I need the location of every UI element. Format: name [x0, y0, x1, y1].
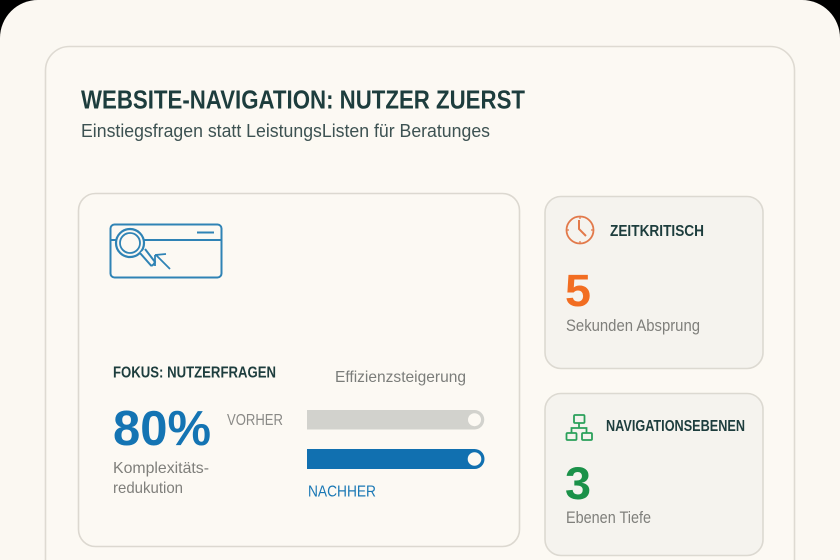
- big number: 5: 5: [565, 265, 591, 316]
- heading: navigationsebenen: NAVIGATIONSEBENEN: [606, 418, 745, 435]
- panel: navigationsebenen: [545, 394, 763, 556]
- label: nachher: NACHHER: [308, 484, 376, 500]
- icon: browser window with magnifier and cursor: [110, 224, 222, 278]
- label: komplexitaetsreduktion: [113, 460, 209, 497]
- subtitle: Einstiegsfragen statt LeistungsListen für Beratunges: [81, 120, 490, 141]
- label: komplexitaetsreduktion: Komplexitäts-: [113, 460, 209, 477]
- icon: hierarchy: [566, 415, 592, 440]
- chart: effizienzsteigerung: [227, 369, 484, 500]
- panel: nutzerfragen: [78, 194, 520, 546]
- label: komplexitaetsreduktion: redukution: [113, 480, 183, 497]
- icon: clock: [566, 216, 594, 244]
- heading: zeitkritisch: ZEITKRITISCH: [610, 223, 704, 240]
- label: ebenen tiefe: Ebenen Tiefe: [566, 509, 651, 527]
- heading: fokus: FOKUS: NUTZERFRAGEN: [113, 364, 276, 382]
- big number: 3: 3: [565, 458, 591, 509]
- label: sekunden absprung: Sekunden Absprung: [566, 317, 700, 335]
- chart title: Effizienzsteigerung: [335, 369, 466, 386]
- bar: nachher: [307, 449, 484, 469]
- label: vorher: VORHER: [227, 412, 283, 429]
- panel: zeitkritisch: [545, 196, 763, 368]
- bar: vorher: [307, 410, 484, 430]
- title: WEBSITE-NAVIGATION: NUTZER ZUERST: [81, 84, 525, 114]
- big number: 80%: 80%: [113, 402, 211, 456]
